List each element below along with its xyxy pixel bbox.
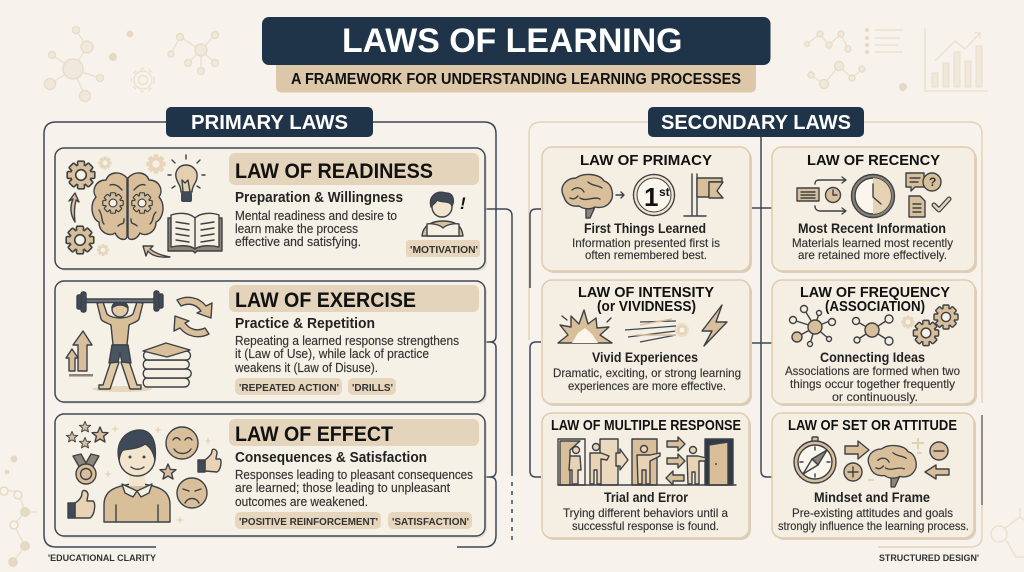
tag: repeated action bbox=[235, 378, 342, 395]
description bbox=[563, 506, 728, 533]
description: Pre-existing attitudes and goals bbox=[792, 506, 953, 520]
icon: person with stars, medal and faces bbox=[66, 421, 221, 524]
law title: LAW OF RECENCY bbox=[807, 152, 940, 169]
heading: secondary laws: SECONDARY LAWS bbox=[661, 112, 851, 134]
primary laws frame bbox=[44, 122, 496, 547]
subtitle: Trial and Error bbox=[604, 489, 688, 505]
icon: compass, brain and signs bbox=[794, 437, 949, 487]
icon: doors, people and arrows bbox=[558, 437, 736, 485]
description: weakens it (Law of Disuse). bbox=[234, 361, 378, 375]
tag: satisfaction bbox=[388, 512, 472, 529]
tag: motivation: 'MOTIVATION' bbox=[410, 244, 478, 256]
law title bbox=[800, 284, 950, 315]
subtitle banner bbox=[276, 60, 756, 92]
description bbox=[235, 468, 473, 509]
panel: law of readiness bbox=[55, 148, 487, 271]
icon: clocks, document and feedback bbox=[797, 173, 949, 218]
subtitle: Connecting Ideas bbox=[820, 349, 925, 365]
heading: primary laws: PRIMARY LAWS bbox=[191, 112, 348, 134]
subtitle: First Things Learned bbox=[584, 220, 706, 236]
tag: drills bbox=[348, 378, 396, 395]
decoration: molecule networks top left bbox=[44, 26, 218, 102]
law title: LAW OF PRIMACY bbox=[580, 152, 712, 169]
description: Materials learned most recently bbox=[792, 236, 953, 250]
title banner: LAWS OF LEARNING bbox=[342, 22, 682, 60]
decoration: molecule bottom left bbox=[0, 456, 37, 567]
law title: LAW OF EXERCISE bbox=[235, 289, 416, 312]
panel: law of frequency bbox=[772, 280, 977, 406]
icon: brain, first badge and flag: 1 bbox=[644, 182, 658, 212]
law title bbox=[229, 419, 479, 446]
description: Repeating a learned response strengthens bbox=[235, 334, 459, 348]
law title bbox=[229, 285, 479, 312]
tag: repeated action: 'REPEATED ACTION' bbox=[239, 382, 339, 394]
icon: clocks, document and feedback: ? bbox=[929, 175, 936, 189]
heading: secondary laws bbox=[648, 107, 864, 137]
panel: law of intensity bbox=[542, 280, 752, 406]
footer note left: 'EDUCATIONAL CLARITY bbox=[48, 553, 156, 563]
description: Associations are formed when two bbox=[785, 364, 960, 378]
icon: student reading: ! bbox=[460, 194, 466, 213]
description bbox=[785, 364, 960, 404]
description: effective and satisfying. bbox=[235, 235, 361, 249]
icon: networks and gears bbox=[790, 305, 958, 346]
icon: brain, first badge and flag bbox=[562, 174, 723, 218]
description: experiences are more effective. bbox=[568, 379, 726, 393]
tag: drills: 'DRILLS' bbox=[352, 382, 393, 394]
tag: positive reinforcement bbox=[235, 512, 381, 529]
description: Responses leading to pleasant consequences bbox=[235, 468, 473, 482]
description bbox=[778, 506, 969, 533]
description bbox=[553, 366, 741, 393]
subtitle: Consequences & Satisfaction bbox=[235, 450, 427, 466]
law title: LAW OF FREQUENCY bbox=[800, 284, 950, 301]
description: or continuously. bbox=[832, 390, 918, 404]
panel: law of multiple response bbox=[542, 413, 751, 540]
footer note right: STRUCTURED DESIGN' bbox=[879, 553, 979, 563]
tag: positive reinforcement: 'POSITIVE REINFORCEMENT' bbox=[239, 516, 378, 528]
icon: brain with gears and book bbox=[66, 154, 222, 257]
panel: law of recency bbox=[772, 147, 977, 273]
panel: law of primacy bbox=[542, 147, 752, 273]
description: it (Law of Use), while lack of practice bbox=[235, 347, 429, 361]
description: learn make the process bbox=[235, 222, 358, 236]
secondary laws frame bbox=[529, 122, 982, 547]
subtitle banner: A FRAMEWORK FOR UNDERSTANDING LEARNING PROCESSES bbox=[291, 71, 741, 88]
panel: law of effect bbox=[55, 414, 487, 538]
description: Trying different behaviors until a bbox=[563, 506, 728, 520]
heading: primary laws bbox=[166, 107, 373, 137]
subtitle: Practice & Repetition bbox=[235, 316, 375, 332]
panel: law of set or attitude bbox=[772, 413, 976, 540]
description: things occur together frequently bbox=[790, 377, 955, 391]
description bbox=[572, 236, 720, 262]
connector lines bbox=[485, 137, 772, 543]
icon: weightlifter with books and arrows bbox=[66, 291, 212, 392]
description bbox=[234, 334, 459, 375]
title banner bbox=[262, 17, 770, 92]
description: are retained more effectively. bbox=[798, 248, 947, 262]
subtitle: Preparation & Willingness bbox=[235, 190, 403, 206]
description: Information presented first is bbox=[572, 236, 720, 250]
description: Dramatic, exciting, or strong learning bbox=[553, 366, 741, 380]
description: strongly influence the learning process. bbox=[778, 519, 969, 533]
law title: LAW OF READINESS bbox=[235, 160, 433, 183]
subtitle: Vivid Experiences bbox=[592, 349, 698, 365]
icon: brain, first badge and flag: st bbox=[659, 185, 670, 199]
tag: satisfaction: 'SATISFACTION' bbox=[392, 516, 469, 528]
icon: explosion, comet and lightning bbox=[558, 305, 727, 346]
description: successful response is found. bbox=[572, 519, 719, 533]
law title: (ASSOCIATION) bbox=[825, 298, 925, 315]
subtitle: Mindset and Frame bbox=[814, 489, 930, 505]
description: outcomes are weakened. bbox=[235, 495, 368, 509]
panel: law of exercise bbox=[55, 281, 487, 404]
decoration: molecule bottom right bbox=[991, 508, 1024, 557]
law title: LAW OF MULTIPLE RESPONSE bbox=[551, 417, 741, 434]
description: often remembered best. bbox=[585, 248, 707, 262]
description: Mental readiness and desire to bbox=[235, 209, 397, 223]
law title: LAW OF SET OR ATTITUDE bbox=[788, 417, 957, 434]
description bbox=[235, 209, 397, 249]
law title bbox=[229, 153, 479, 185]
law title bbox=[578, 284, 714, 315]
decoration: chart and lists top right bbox=[804, 28, 988, 91]
subtitle: Most Recent Information bbox=[798, 220, 946, 236]
description: are learned; those leading to unpleasant bbox=[235, 481, 450, 495]
law title: LAW OF EFFECT bbox=[235, 423, 393, 446]
law title: (or VIVIDNESS) bbox=[597, 298, 696, 315]
law title: LAW OF INTENSITY bbox=[578, 284, 714, 301]
tag: motivation bbox=[406, 240, 480, 257]
icon: student reading bbox=[422, 192, 466, 236]
description bbox=[792, 236, 953, 262]
